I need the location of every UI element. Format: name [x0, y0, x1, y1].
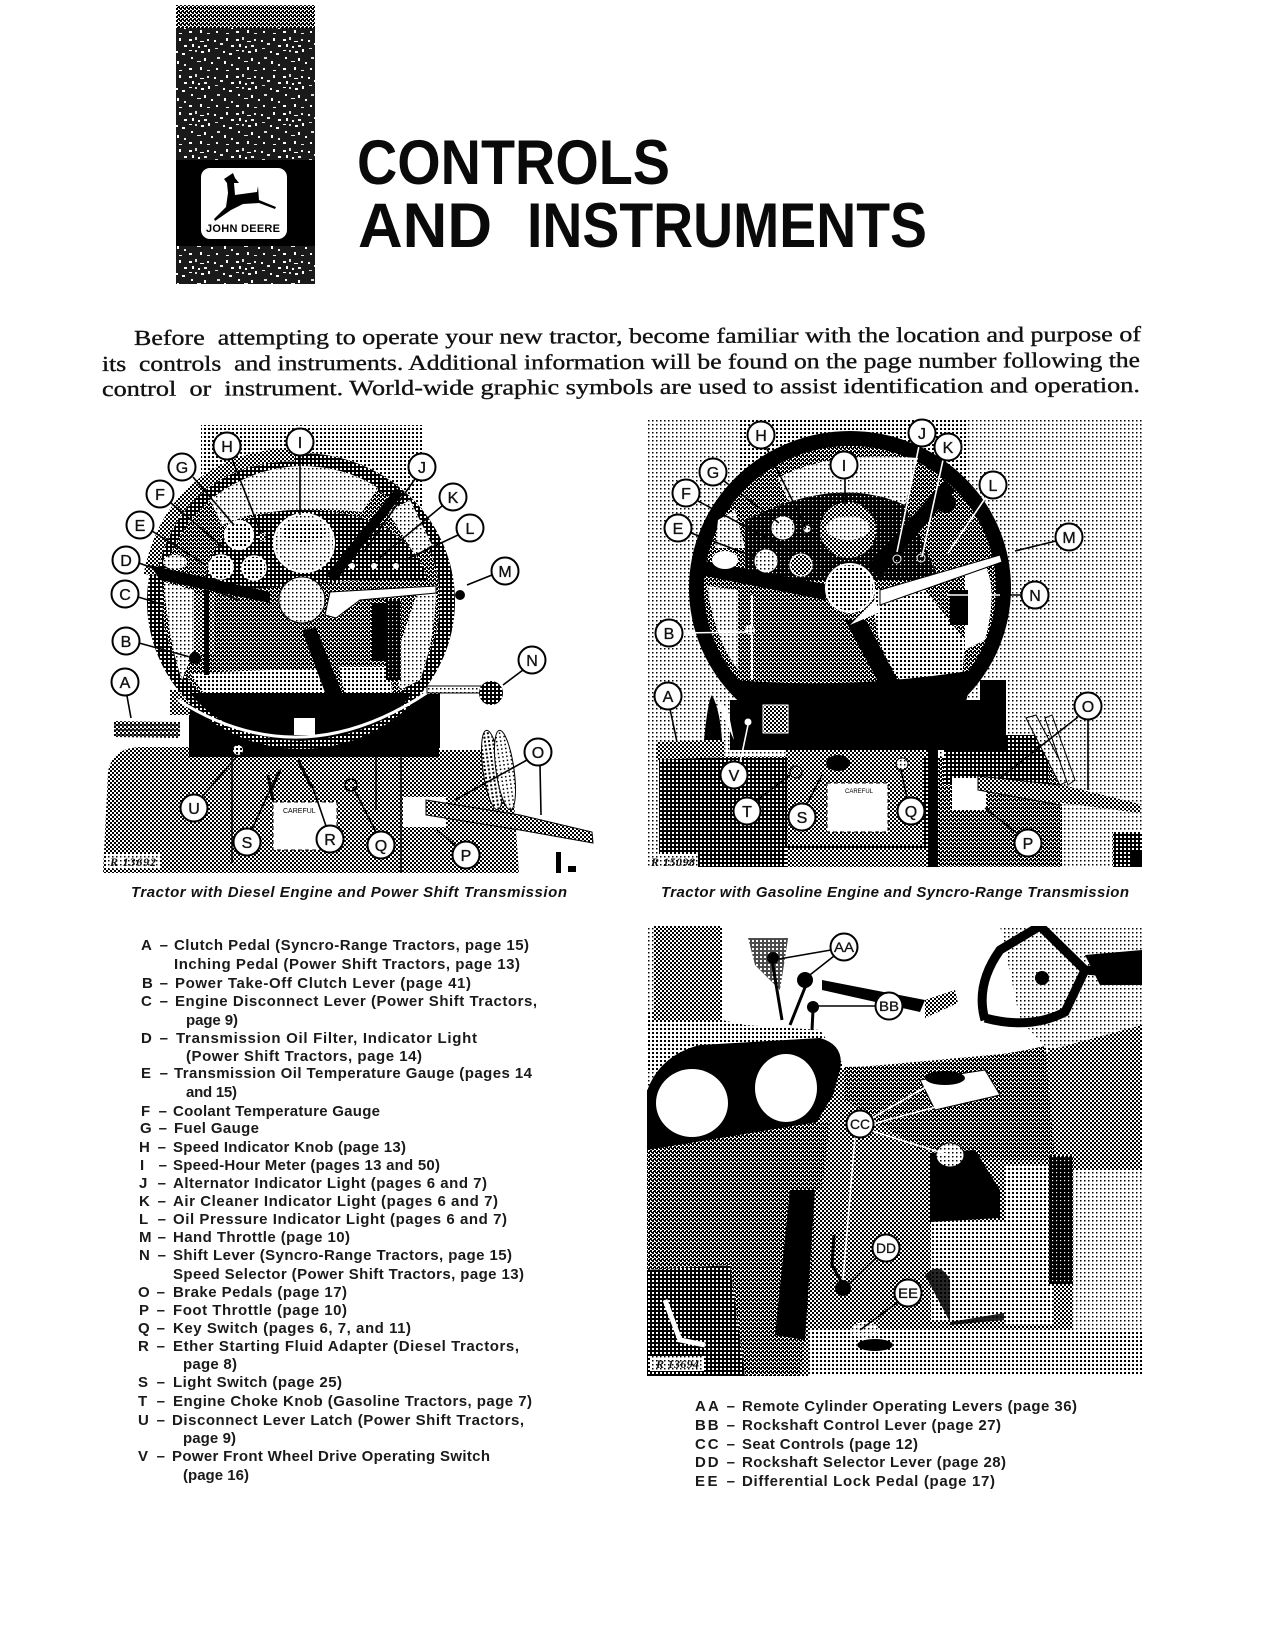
legend: controls A to V	[138, 937, 537, 1484]
callout: I	[286, 428, 314, 515]
legend entry R: R –	[138, 1338, 165, 1355]
legend entry E	[141, 1065, 533, 1101]
callout: V: V	[729, 768, 740, 785]
legend entry R: page 8)	[183, 1356, 237, 1373]
callout: G	[168, 454, 234, 525]
icon: John Deere badge	[201, 168, 287, 239]
legend entry C: page 9)	[186, 1012, 238, 1029]
legend entry H: Speed Indicator Knob (page 13)	[173, 1139, 406, 1156]
callout: S: S	[797, 810, 807, 827]
legend entry L: L –	[139, 1211, 166, 1228]
legend entry E: and 15)	[186, 1084, 237, 1101]
callout: AA: AA	[834, 939, 855, 955]
photo number: R 15098	[650, 855, 695, 869]
legend entry S: S –	[138, 1374, 165, 1391]
photo: seat and rockshaft controls	[647, 926, 1142, 1376]
legend entry L: Oil Pressure Indicator Light (pages 6 and 7)	[173, 1211, 507, 1228]
legend entry I: I –	[140, 1157, 167, 1174]
legend entry S: Light Switch (page 25)	[173, 1374, 342, 1391]
legend entry F: F –	[141, 1103, 167, 1120]
callout: J: J	[418, 460, 426, 477]
legend entry DD: Rockshaft Selector Lever (page 28)	[742, 1454, 1006, 1471]
callout: C	[112, 580, 165, 608]
legend entry P: Foot Throttle (page 10)	[173, 1302, 347, 1319]
legend entry B: Power Take-Off Clutch Lever (page 41)	[175, 975, 471, 992]
legend entry V: (page 16)	[183, 1467, 249, 1484]
icon: John Deere badge: JOHN DEERE	[206, 223, 280, 235]
legend entry BB: Rockshaft Control Lever (page 27)	[742, 1417, 1001, 1434]
callout: S: S	[242, 835, 252, 852]
callout: R	[312, 785, 344, 852]
callout: P: P	[461, 848, 471, 865]
legend entry E: E –	[141, 1065, 168, 1082]
intro paragraph: Before attempting to operate your new tractor, become familiar with the location and purpose of	[134, 322, 1142, 350]
legend entry K: Air Cleaner Indicator Light (pages 6 and 7)	[173, 1193, 498, 1210]
callout: I: I	[842, 458, 846, 475]
callout: CC: CC	[850, 1116, 870, 1132]
callout: E	[126, 512, 206, 565]
photo number: R 13694	[655, 1357, 699, 1371]
callout: EE	[860, 1280, 922, 1330]
legend entry N: Speed Selector (Power Shift Tractors, page 13)	[173, 1266, 524, 1283]
photo: diesel tractor steering wheel and dash: CAREFUL	[283, 808, 316, 815]
callout: M: M	[1062, 530, 1076, 547]
legend entry BB: BB –	[695, 1417, 735, 1434]
legend entry CC: Seat Controls (page 12)	[742, 1436, 918, 1453]
callout: N: N	[1029, 588, 1041, 605]
legend entry O: Brake Pedals (page 17)	[173, 1284, 347, 1301]
legend entry U	[138, 1412, 524, 1447]
callout: AA	[779, 934, 858, 978]
legend entry U: page 9)	[183, 1430, 236, 1447]
callout: O	[455, 738, 552, 815]
logo strip	[176, 5, 315, 284]
callout: G: G	[176, 460, 188, 477]
legend entry C	[141, 993, 537, 1029]
legend entry J: J –	[139, 1175, 166, 1192]
legend entry E: Transmission Oil Temperature Gauge (pages 14	[174, 1065, 533, 1082]
legend entry D: Transmission Oil Filter, Indicator Light	[176, 1030, 477, 1047]
callout: B: B	[664, 626, 674, 643]
callout: DD	[845, 1234, 900, 1288]
legend entry T: Engine Choke Knob (Gasoline Tractors, page 7)	[173, 1393, 532, 1410]
callout: CC	[843, 1084, 952, 1280]
legend entry D: (Power Shift Tractors, page 14)	[186, 1048, 422, 1065]
legend entry V: Power Front Wheel Drive Operating Switch	[172, 1448, 490, 1465]
callout: H: H	[755, 428, 767, 445]
callout: Q	[353, 787, 394, 858]
callout: M	[467, 558, 518, 585]
caption: diesel tractor: Tractor with Diesel Engine and Power Shift Transmission	[131, 884, 567, 901]
legend entry N	[139, 1247, 524, 1283]
intro paragraph: its controls and instruments. Additional information will be found on the page number following the	[102, 348, 1140, 376]
legend entry R	[138, 1338, 519, 1373]
legend entry V	[138, 1448, 490, 1484]
callout: J	[363, 454, 436, 553]
callout: I	[830, 452, 858, 505]
callout: B	[656, 620, 748, 646]
callout: P	[437, 830, 480, 868]
legend: controls AA to EE	[695, 1398, 1077, 1490]
photo panel: diesel tractor	[103, 425, 593, 873]
legend entry CC: CC –	[695, 1436, 735, 1453]
callout: L: L	[989, 478, 998, 495]
callout: M: M	[498, 564, 512, 581]
legend entry G: Fuel Gauge	[174, 1120, 259, 1137]
callout: U: U	[188, 801, 200, 818]
callout: B	[112, 628, 190, 657]
legend entry G: G –	[140, 1120, 167, 1137]
callout: S	[234, 790, 270, 856]
title: CONTROLS	[357, 128, 670, 198]
legend entry AA: AA –	[695, 1398, 735, 1415]
callout: E	[664, 514, 755, 557]
callout: J	[897, 420, 936, 552]
legend entry N: N –	[139, 1247, 166, 1264]
callout: H: H	[221, 439, 233, 456]
callout: N	[947, 582, 1048, 608]
callout: K	[377, 484, 466, 560]
title: AND	[358, 191, 492, 261]
callout: M	[1015, 524, 1082, 551]
legend entry C: Engine Disconnect Lever (Power Shift Tractors,	[175, 993, 537, 1010]
callout: O	[1000, 692, 1102, 790]
legend entry M: Hand Throttle (page 10)	[173, 1229, 350, 1246]
caption: gasoline tractor: Tractor with Gasoline Engine and Syncro-Range Transmission	[661, 884, 1129, 901]
legend entry U: U –	[138, 1412, 165, 1429]
callout: G: G	[707, 465, 719, 482]
callout: K: K	[448, 490, 459, 507]
callout: F: F	[155, 487, 165, 504]
legend entry D	[141, 1030, 477, 1065]
legend entry P: P –	[139, 1302, 165, 1319]
callout: E: E	[135, 518, 145, 535]
callout: D: D	[120, 553, 132, 570]
callout: O: O	[532, 745, 544, 762]
callout: H	[748, 422, 806, 528]
legend entry A: Inching Pedal (Power Shift Tractors, page 13)	[174, 956, 520, 973]
photo: diesel tractor steering wheel and dash	[103, 425, 593, 873]
callout: BB: BB	[879, 998, 899, 1014]
callout: B: B	[121, 634, 131, 651]
callout: A	[654, 682, 682, 742]
legend entry O: O –	[138, 1284, 165, 1301]
photo panel: gasoline tractor	[647, 418, 1142, 869]
callout: P: P	[1023, 836, 1033, 853]
legend entry Q: Q –	[138, 1320, 165, 1337]
callout: D	[112, 546, 239, 600]
callout: K	[922, 434, 962, 557]
callout: V	[720, 725, 748, 788]
callout: Q: Q	[375, 838, 387, 855]
legend entry DD: DD –	[695, 1454, 735, 1471]
legend entry A	[141, 937, 529, 973]
callout: S	[788, 775, 822, 830]
photo number: R 13692	[109, 855, 156, 869]
title: INSTRUMENTS	[527, 191, 927, 261]
callout: F: F	[681, 486, 691, 503]
callout: O: O	[1082, 699, 1094, 716]
legend entry A: A –	[141, 937, 168, 954]
callout: P	[985, 808, 1042, 856]
callout: EE: EE	[898, 1285, 918, 1301]
callout: R: R	[324, 832, 336, 849]
legend entry R: Ether Starting Fluid Adapter (Diesel Tractors,	[173, 1338, 519, 1355]
callout: K: K	[943, 440, 954, 457]
legend entry AA: Remote Cylinder Operating Levers (page 36)	[742, 1398, 1077, 1415]
legend entry F: Coolant Temperature Gauge	[173, 1103, 380, 1120]
legend entry U: Disconnect Lever Latch (Power Shift Tractors,	[172, 1412, 524, 1429]
legend entry Q: Key Switch (pages 6, 7, and 11)	[173, 1320, 411, 1337]
callout: N: N	[526, 653, 538, 670]
legend entry EE: Differential Lock Pedal (page 17)	[742, 1473, 995, 1490]
callout: N	[503, 646, 546, 685]
callout: H	[214, 432, 261, 533]
legend entry T: T –	[138, 1393, 165, 1410]
title	[357, 128, 927, 261]
photo: gasoline tractor steering wheel and dash	[647, 418, 1142, 867]
callout: J: J	[918, 426, 926, 443]
legend entry A: Clutch Pedal (Syncro-Range Tractors, page 15)	[174, 937, 529, 954]
legend entry B: B –	[142, 975, 168, 992]
callout: G	[700, 458, 779, 523]
legend entry C: C –	[141, 993, 168, 1010]
callout: Q: Q	[905, 804, 917, 821]
callout: DD: DD	[876, 1240, 896, 1256]
callout: A	[112, 668, 138, 718]
callout: F	[672, 480, 793, 552]
photo panel: rear controls	[647, 926, 1142, 1376]
intro paragraph: control or instrument. World-wide graphic symbols are used to assist identification and operation.	[102, 373, 1140, 401]
legend entry N: Shift Lever (Syncro-Range Tractors, page 15)	[173, 1247, 512, 1264]
callout: F	[146, 480, 223, 547]
callout: T	[734, 775, 790, 824]
callout: I: I	[298, 435, 302, 452]
legend entry M: M –	[139, 1229, 166, 1246]
callout: T: T	[742, 804, 752, 821]
callout: Q	[898, 770, 924, 824]
photo: gasoline tractor steering wheel and dash: CAREFUL	[845, 789, 874, 795]
legend entry EE: EE –	[695, 1473, 735, 1490]
callout: C: C	[119, 587, 131, 604]
legend entry I: Speed-Hour Meter (pages 13 and 50)	[173, 1157, 440, 1174]
callout: E: E	[673, 521, 683, 538]
callout: L	[405, 514, 484, 560]
legend entry H: H –	[139, 1139, 166, 1156]
callout: L: L	[466, 521, 475, 538]
callout: BB	[815, 992, 902, 1020]
callout: U	[180, 755, 238, 822]
intro paragraph	[102, 322, 1142, 401]
callout: L	[948, 472, 1006, 553]
callout: A: A	[663, 689, 674, 706]
callout: A: A	[120, 675, 131, 692]
legend entry J: Alternator Indicator Light (pages 6 and 7)	[173, 1175, 487, 1192]
legend entry K: K –	[139, 1193, 166, 1210]
legend entry V: V –	[138, 1448, 165, 1465]
legend entry D: D –	[141, 1030, 168, 1047]
